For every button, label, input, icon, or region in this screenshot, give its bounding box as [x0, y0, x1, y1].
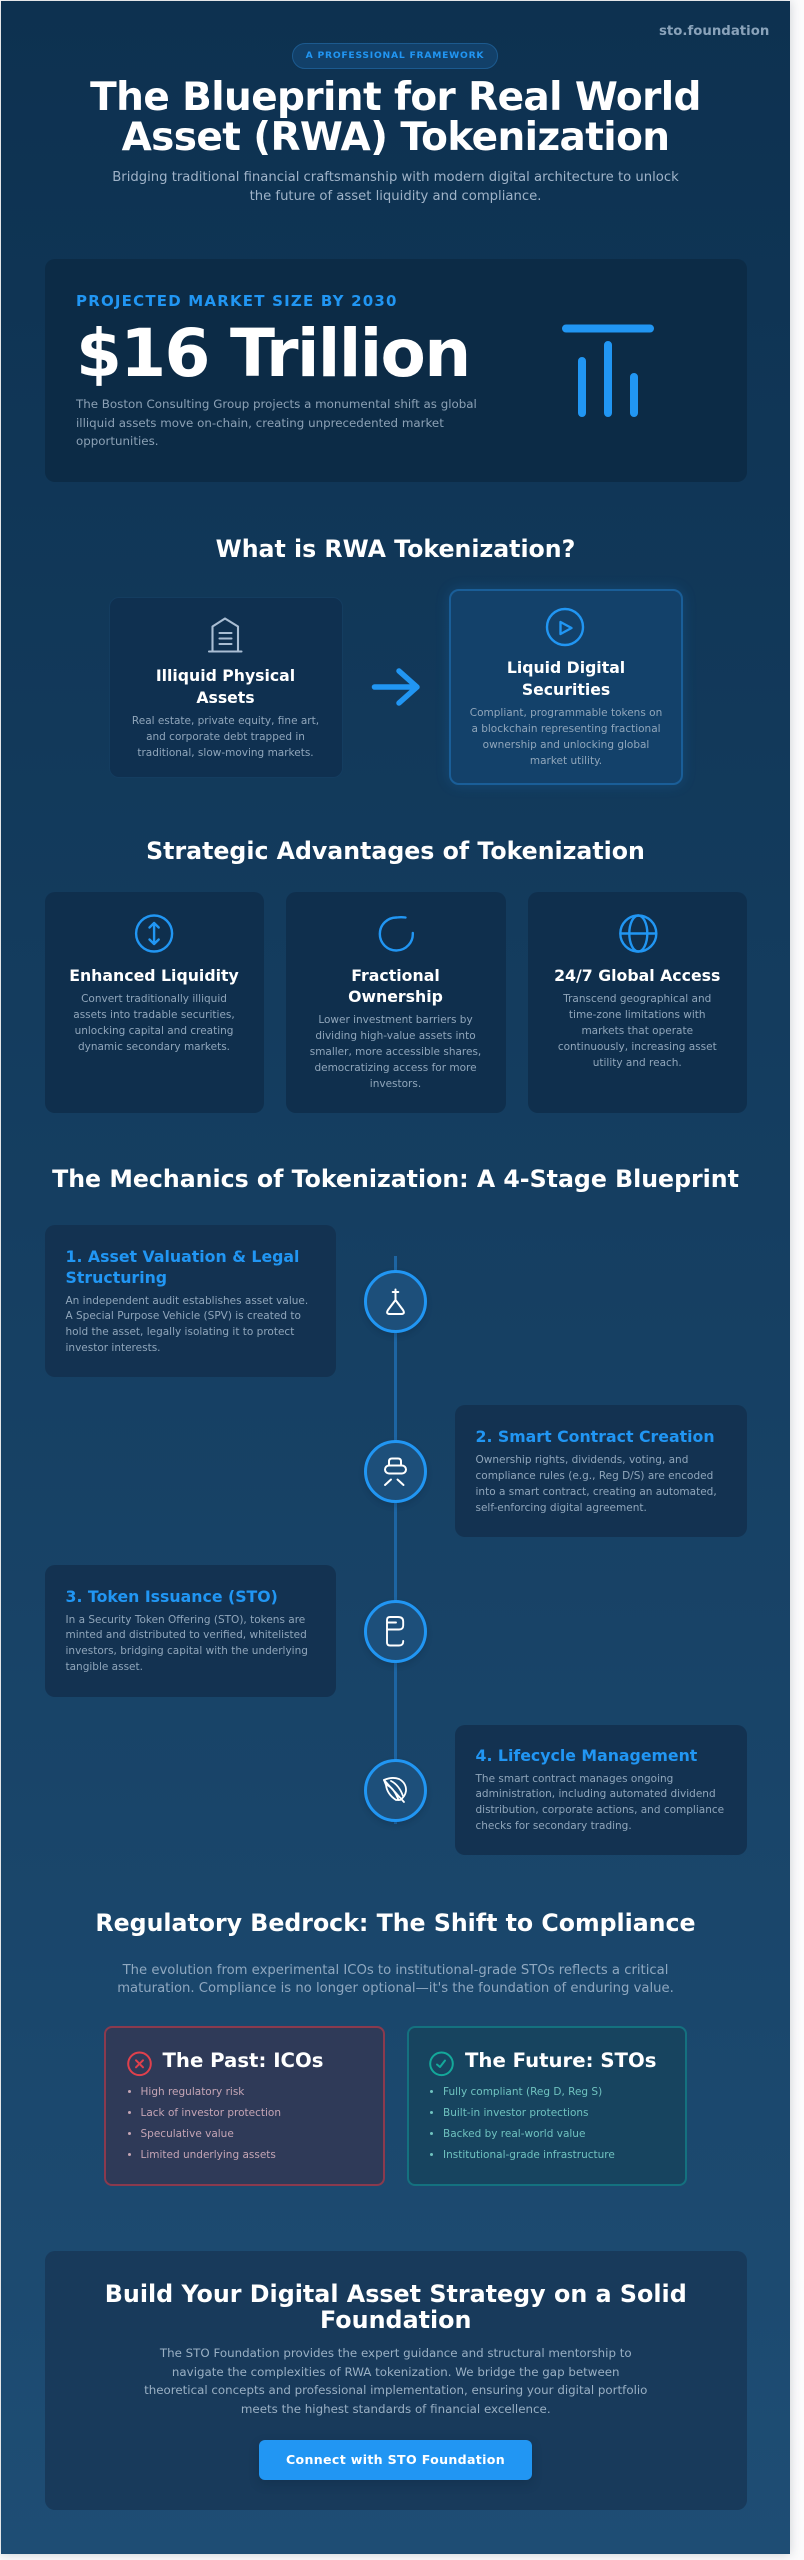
- past list: Limited underlying assets: [140, 2149, 276, 2161]
- stage 2 description: [476, 1454, 717, 1514]
- icon: open ring: [378, 916, 414, 952]
- call to action text: theoretical concepts and professional implementation, ensuring your digital portfolio: [144, 2383, 647, 2397]
- timeline line: [394, 1256, 397, 1824]
- stage 3 description: tangible asset.: [66, 1661, 143, 1673]
- card title: Illiquid Physical: [156, 666, 295, 685]
- title: [90, 75, 701, 160]
- past list: Speculative value: [140, 2128, 234, 2140]
- card title: Liquid Digital: [507, 658, 625, 677]
- market size description: [76, 397, 477, 448]
- arrow: physical to digital: [372, 668, 420, 706]
- card description: and corporate debt trapped in: [146, 730, 305, 742]
- stage 2 title: 2. Smart Contract Creation: [476, 1427, 715, 1446]
- card title: Securities: [522, 680, 610, 699]
- card description: ownership and unlocking global: [483, 738, 649, 750]
- panel: enhanced liquidity: [44, 892, 264, 1112]
- stage 1 title: Structuring: [66, 1268, 167, 1286]
- card description: market utility.: [530, 754, 602, 766]
- stage 3 description: In a Security Token Offering (STO), tokens are: [66, 1614, 305, 1626]
- card title: Assets: [196, 688, 255, 707]
- regulatory text block: The evolution from experimental ICOs to institutional-grade STOs reflects a critical: [123, 1963, 668, 1978]
- future list: [430, 2086, 615, 2161]
- card title: [156, 666, 295, 707]
- card description: Compliant, programmable tokens on: [470, 706, 662, 718]
- panel: illiquid physical assets: [108, 597, 342, 778]
- stage 3 node: token icon: [364, 1600, 427, 1662]
- heading: what is RWA tokenization: What is RWA Tokenization?: [216, 535, 575, 563]
- card description: [558, 993, 717, 1069]
- title: The Blueprint for Real World: [90, 75, 701, 120]
- stage 4 title: 4. Lifecycle Management: [476, 1746, 697, 1764]
- card description: democratizing access for more: [314, 1062, 477, 1074]
- stage 2 description: compliance rules (e.g., Reg D/S) are encoded: [476, 1470, 713, 1482]
- card title: Enhanced Liquidity: [69, 966, 239, 985]
- market size label: PROJECTED MARKET SIZE BY 2030: [76, 292, 398, 310]
- market size description: The Boston Consulting Group projects a monumental shift as global: [76, 397, 477, 411]
- past list: Lack of investor protection: [140, 2107, 281, 2119]
- card description: unlocking capital and creating: [75, 1025, 233, 1037]
- future list: Built-in investor protections: [443, 2107, 589, 2119]
- heading: regulatory bedrock: Regulatory Bedrock: The Shift to Compliance: [95, 1908, 696, 1936]
- card title: Ownership: [348, 987, 443, 1006]
- stage 1 description: [66, 1294, 308, 1354]
- card title: 24/7 Global Access: [554, 966, 720, 985]
- stage 1 description: An independent audit establishes asset value.: [66, 1294, 308, 1306]
- stage 1 title: [66, 1246, 299, 1286]
- stage 1 description: investor interests.: [66, 1342, 161, 1354]
- stage 4 description: [476, 1772, 724, 1832]
- icon: check circle: [429, 2052, 454, 2076]
- card description: assets into tradable securities,: [73, 1009, 235, 1021]
- button: connect: [259, 2440, 532, 2480]
- future heading: The Future: STOs: [465, 2049, 656, 2072]
- panel: liquid digital securities: [449, 589, 683, 785]
- heading: mechanics: The Mechanics of Tokenization: A 4-Stage Blueprint: [52, 1165, 739, 1193]
- past heading: The Past: ICOs: [162, 2049, 323, 2072]
- panel: global access: [528, 892, 747, 1112]
- card description: [470, 706, 662, 766]
- button: connect: Connect with STO Foundation: [286, 2452, 505, 2467]
- call to action text: meets the highest standards of financial excellence.: [241, 2402, 551, 2416]
- card description: Transcend geographical and: [563, 993, 711, 1005]
- card description: markets that operate: [581, 1025, 693, 1037]
- call to action heading: Foundation: [320, 2306, 471, 2334]
- call to action text: The STO Foundation provides the expert guidance and structural mentorship to: [160, 2346, 632, 2360]
- card description: [73, 993, 235, 1053]
- title: Asset (RWA) Tokenization: [122, 115, 669, 160]
- future list: Backed by real-world value: [443, 2128, 585, 2140]
- stage 4 description: checks for secondary trading.: [476, 1820, 632, 1832]
- stage 4 node: shell icon: [364, 1759, 427, 1822]
- card description: dividing high-value assets into: [315, 1030, 476, 1042]
- panel: the past ICOs: [104, 2026, 385, 2186]
- market size description: opportunities.: [76, 434, 159, 448]
- past list: High regulatory risk: [140, 2086, 244, 2098]
- stage 4 description: The smart contract manages ongoing: [476, 1772, 673, 1784]
- call to action heading: Build Your Digital Asset Strategy on a Solid: [105, 2280, 687, 2308]
- card description: Real estate, private equity, fine art,: [132, 714, 319, 726]
- panel: call to action: [44, 2251, 747, 2510]
- regulatory text block: maturation. Compliance is no longer optional—it's the foundation of enduring value.: [117, 1981, 674, 1996]
- stage 2 description: Ownership rights, dividends, voting, and: [476, 1454, 688, 1466]
- stage 3 description: minted and distributed to verified, whitelisted: [66, 1629, 307, 1641]
- stage 4 description: administration, including automated dividend: [476, 1788, 716, 1800]
- panel: fractional ownership: [286, 892, 506, 1112]
- market size number: $16 Trillion: [76, 315, 470, 392]
- card description: [132, 714, 319, 758]
- card description: Lower investment barriers by: [318, 1014, 473, 1026]
- card description: Convert traditionally illiquid: [81, 993, 227, 1005]
- card description: investors.: [370, 1078, 421, 1090]
- stage 3 description: [66, 1614, 308, 1673]
- call to action text: navigate the complexities of RWA tokenization. We bridge the gap between: [172, 2365, 620, 2379]
- brand: sto.foundation: sto.foundation: [659, 24, 769, 39]
- icon: up-down arrows: [134, 914, 174, 953]
- stage 2 node: contract icon: [364, 1440, 427, 1502]
- stage 1 node: flask icon: [364, 1270, 427, 1332]
- heading: strategic advantages: Strategic Advantages of Tokenization: [146, 837, 645, 865]
- card title: [348, 966, 443, 1006]
- icon: globe: [619, 914, 658, 953]
- call to action heading: [105, 2280, 687, 2334]
- card title: [507, 658, 625, 699]
- card description: a blockchain representing fractional: [471, 722, 661, 734]
- stage 1 description: A Special Purpose Vehicle (SPV) is created to: [66, 1310, 301, 1322]
- card description: smaller, more accessible shares,: [310, 1046, 481, 1058]
- icon: play circle: [546, 608, 584, 646]
- card description: time-zone limitations with: [569, 1009, 706, 1021]
- future list: Institutional-grade infrastructure: [443, 2149, 615, 2161]
- stage 3 description: investors, bridging capital with the underlying: [66, 1645, 308, 1657]
- card description: traditional, slow-moving markets.: [137, 746, 314, 758]
- future list: Fully compliant (Reg D, Reg S): [443, 2086, 602, 2098]
- subtitle: [112, 170, 679, 204]
- stage 4 description: distribution, corporate actions, and compliance: [476, 1804, 724, 1816]
- panel: the future STOs: [407, 2026, 687, 2186]
- market size description: illiquid assets move on-chain, creating unprecedented market: [76, 416, 444, 430]
- past list: [128, 2086, 281, 2161]
- icon: column chart: [562, 324, 654, 417]
- card title: Fractional: [351, 966, 440, 985]
- card description: utility and reach.: [593, 1057, 682, 1069]
- regulatory text block: [117, 1963, 674, 1996]
- badge: a professional framework: [292, 43, 498, 69]
- icon: cross circle: [127, 2052, 152, 2076]
- stage 1 title: 1. Asset Valuation & Legal: [66, 1246, 299, 1266]
- stage 2 card: [455, 1405, 747, 1537]
- stage 4 card: [455, 1724, 747, 1855]
- icon: building: [208, 617, 242, 652]
- subtitle: Bridging traditional financial craftsmanship with modern digital architecture to unlock: [112, 170, 679, 184]
- stage 2 description: self-enforcing digital agreement.: [476, 1502, 647, 1514]
- stage 3 card: [44, 1565, 336, 1697]
- panel: projected market size: [44, 259, 746, 482]
- call to action text: [144, 2346, 647, 2416]
- card description: dynamic secondary markets.: [78, 1041, 230, 1053]
- stage 1 card: [44, 1225, 336, 1377]
- stage 1 description: hold the asset, legally isolating it to protect: [66, 1326, 294, 1338]
- subtitle: the future of asset liquidity and compliance.: [250, 188, 541, 204]
- stage 3 title: 3. Token Issuance (STO): [66, 1586, 278, 1606]
- card description: continuously, increasing asset: [558, 1041, 717, 1053]
- badge: a professional framework: A PROFESSIONAL FRAMEWORK: [306, 50, 484, 61]
- stage 2 description: into a smart contract, creating an automated,: [476, 1486, 717, 1498]
- card description: [310, 1014, 481, 1090]
